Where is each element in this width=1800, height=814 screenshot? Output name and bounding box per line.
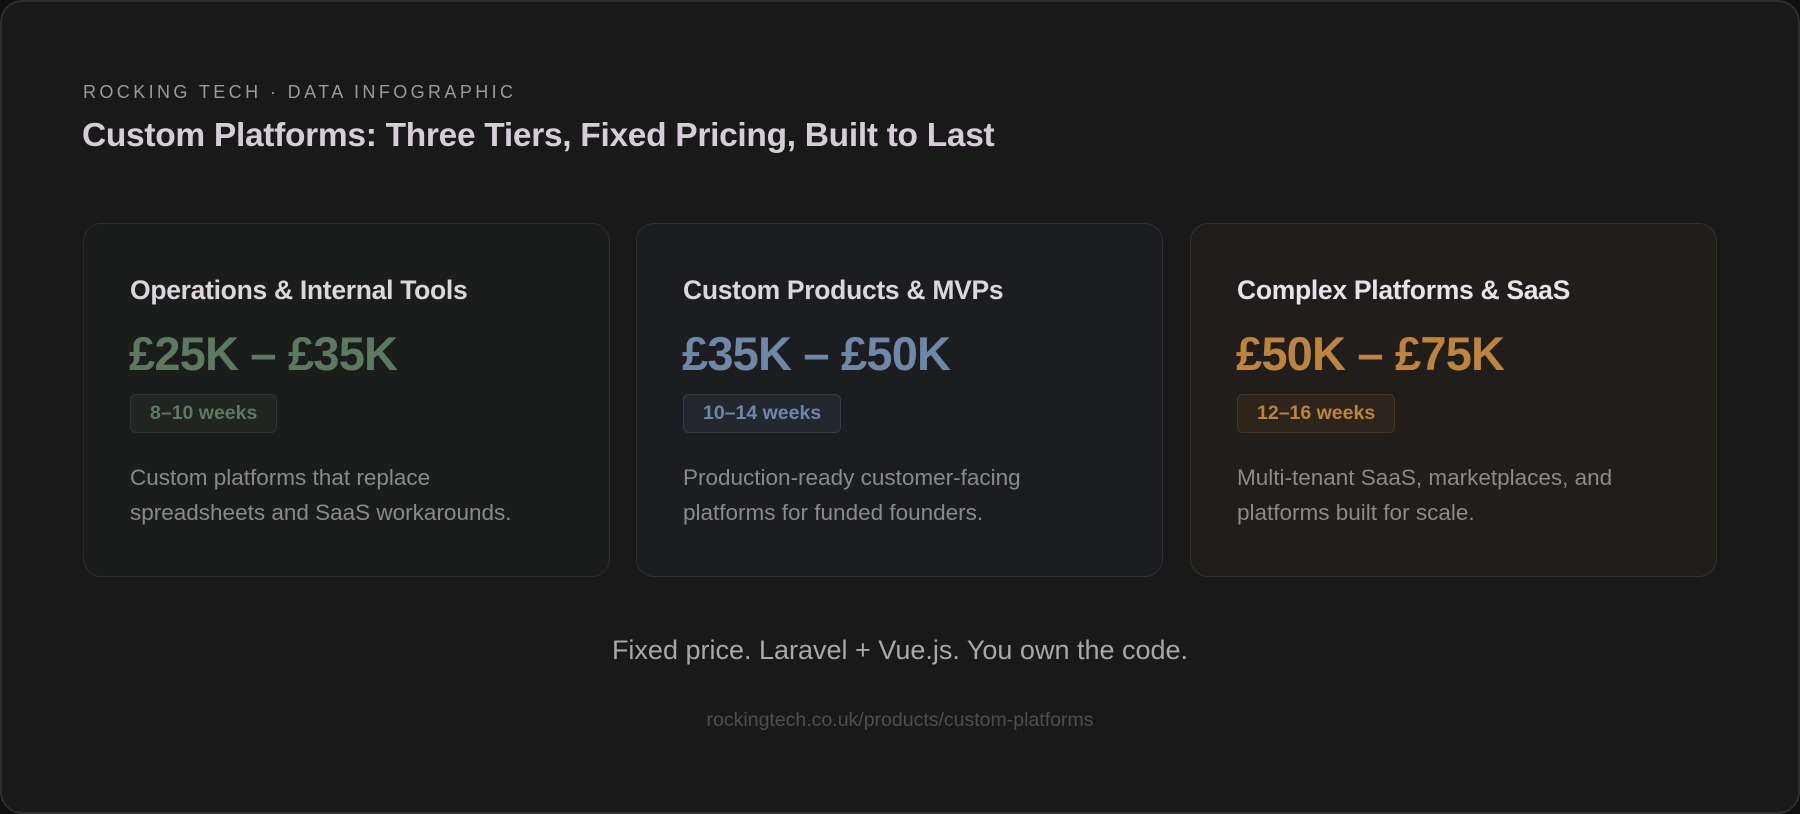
tier heading: Complex Platforms & SaaS <box>1237 275 1570 305</box>
panel: complex tier <box>1190 223 1717 577</box>
source url: rockingtech.co.uk/products/custom-platforms <box>707 709 1093 731</box>
eyebrow label: ROCKING TECH · DATA INFOGRAPHIC <box>83 82 516 102</box>
price: £35K – £50K <box>682 327 950 380</box>
panel: operations tier <box>83 223 610 577</box>
badge: duration <box>130 394 277 433</box>
badge: duration: 12–16 weeks <box>1257 402 1375 424</box>
tier heading: Custom Products & MVPs <box>683 275 1003 305</box>
tier heading: Operations & Internal Tools <box>130 275 467 305</box>
badge: duration: 10–14 weeks <box>703 402 821 424</box>
badge: duration <box>683 394 841 433</box>
description: Multi-tenant SaaS, marketplaces, and platforms built for scale. <box>1237 465 1612 525</box>
price: £50K – £75K <box>1236 327 1504 380</box>
tagline: Fixed price. Laravel + Vue.js. You own the code. <box>612 635 1188 665</box>
badge: duration: 8–10 weeks <box>150 402 257 424</box>
description: Production-ready customer-facing platforms for funded founders. <box>683 465 1021 525</box>
panel: products tier <box>636 223 1163 577</box>
title: Custom Platforms: Three Tiers, Fixed Pricing, Built to Last <box>82 117 994 154</box>
description: Custom platforms that replace spreadsheets and SaaS workarounds. <box>130 465 512 525</box>
badge: duration <box>1237 394 1395 433</box>
price: £25K – £35K <box>129 327 397 380</box>
